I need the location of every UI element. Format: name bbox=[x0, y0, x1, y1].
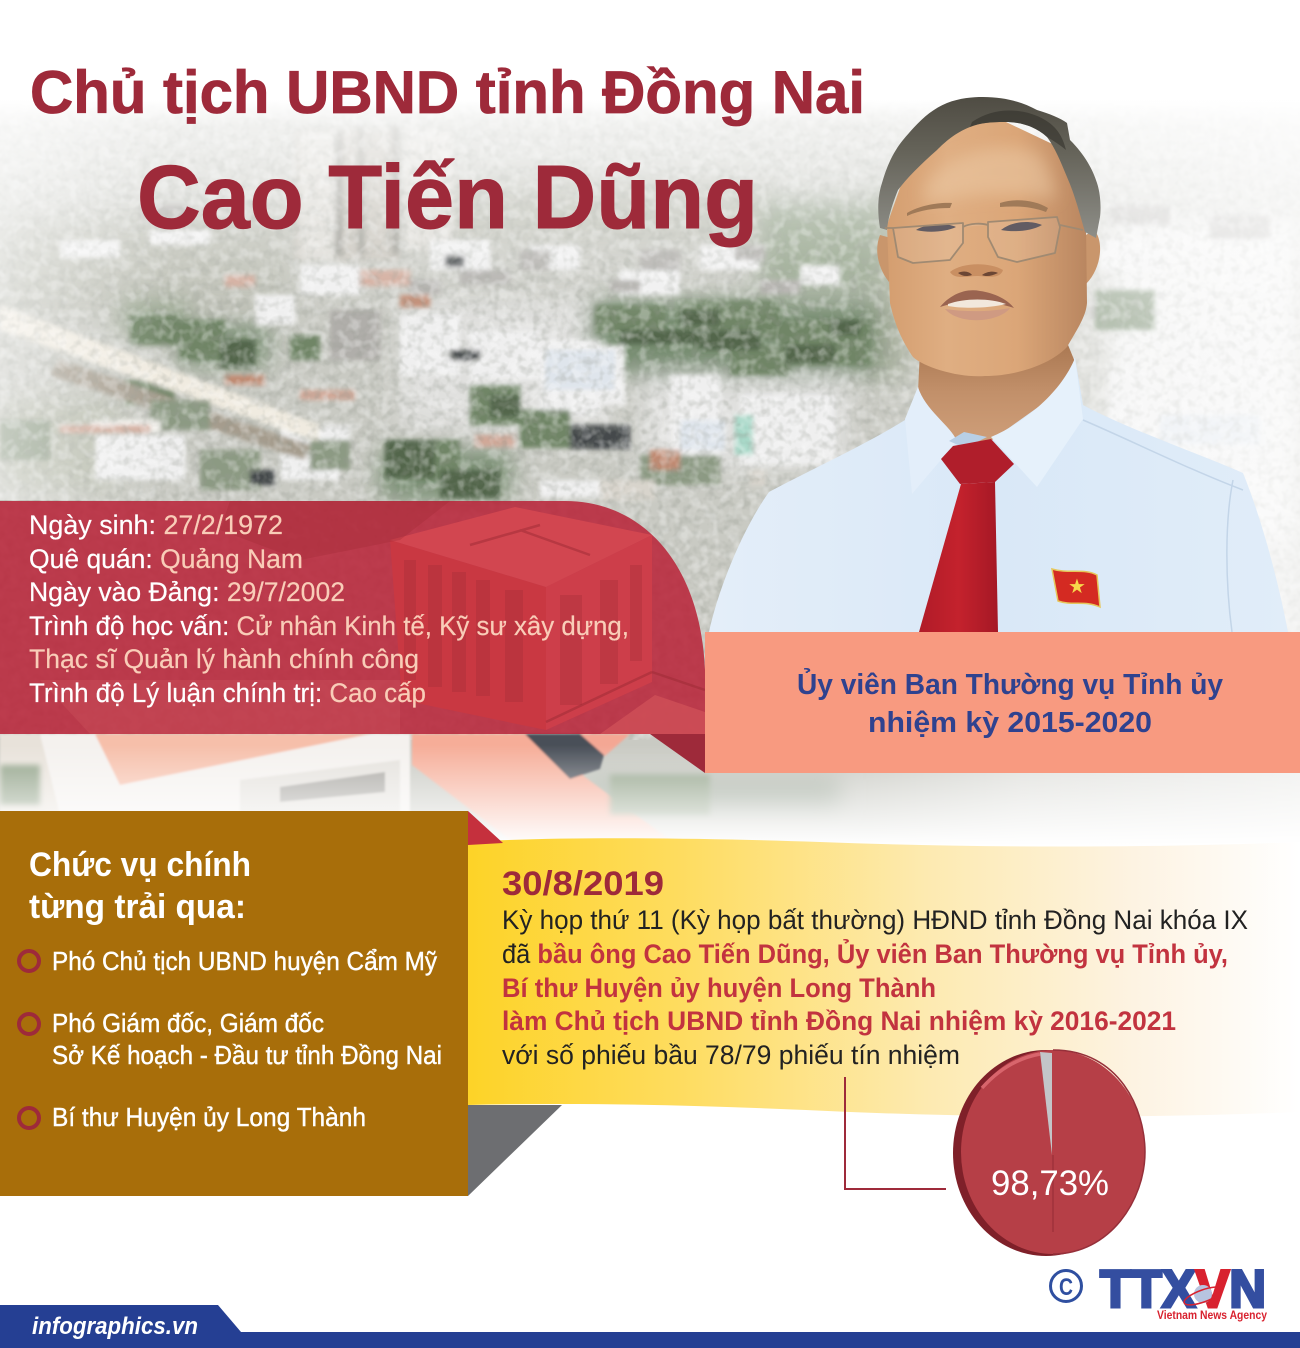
logo: globe bbox=[1182, 1284, 1224, 1308]
panel: personal information bbox=[0, 501, 705, 773]
birth date: Ngày sinh: 27/2/1972 bbox=[29, 510, 283, 540]
portrait: collar right bbox=[991, 358, 1083, 487]
portrait: eyebrows bbox=[907, 200, 1048, 216]
pie: minority slice bbox=[1040, 1052, 1052, 1155]
party join date: Ngày vào Đảng: 29/7/2002 bbox=[29, 577, 345, 607]
role line 2: nhiệm kỳ 2015-2020 bbox=[868, 707, 1152, 739]
portrait: shirt bbox=[709, 358, 1288, 632]
positions heading: Chức vụ chính bbox=[29, 846, 251, 884]
panel: fold bbox=[650, 734, 705, 773]
panel: election result band bbox=[468, 838, 1300, 1116]
portrait: badge: ★ bbox=[1068, 576, 1086, 598]
education line 2: Thạc sĩ Quản lý hành chính công bbox=[29, 644, 419, 674]
connector line to pie bbox=[845, 1077, 946, 1189]
gray corner fold bbox=[468, 1105, 562, 1196]
education: Trình độ học vấn: Cử nhân Kinh tế, Kỹ sư xây dựng, bbox=[29, 611, 629, 641]
red corner fold bbox=[468, 811, 503, 845]
portrait: nose bbox=[950, 264, 1003, 277]
pie chart: 98,73% bbox=[953, 1050, 1145, 1256]
position 2: Phó Giám đốc, Giám đốc bbox=[52, 1008, 324, 1038]
panel: building seen through bbox=[40, 501, 705, 734]
election text: làm Chủ tịch UBND tỉnh Đồng Nai nhiệm kỳ 2016-2021 bbox=[502, 1006, 1176, 1036]
copyright symbol: C bbox=[1059, 1274, 1073, 1301]
portrait bbox=[709, 97, 1288, 632]
position 2: Sở Kế hoạch - Đầu tư tỉnh Đồng Nai bbox=[52, 1040, 442, 1070]
panel: previous positions bbox=[0, 811, 468, 1196]
title line 1: Chủ tịch UBND tỉnh Đồng Nai bbox=[30, 59, 865, 126]
pale tower blocks bbox=[295, 130, 400, 260]
portrait: badge bbox=[1052, 569, 1100, 607]
portrait: collar inside bbox=[949, 432, 987, 448]
copyright symbol bbox=[1050, 1270, 1082, 1302]
portrait: mouth bbox=[940, 290, 1014, 308]
election text bbox=[502, 905, 1248, 1070]
pie: value label: 98,73% bbox=[991, 1164, 1109, 1203]
title line 2: name: Cao Tiến Dũng bbox=[137, 148, 758, 248]
election text: với số phiếu bầu 78/79 phiếu tín nhiệm bbox=[502, 1040, 960, 1070]
portrait: shirt seam bbox=[1083, 420, 1243, 632]
portrait: glasses bbox=[885, 217, 1083, 263]
election text: Kỳ họp thứ 11 (Kỳ họp bất thường) HĐND tỉnh Đồng Nai khóa IX bbox=[502, 905, 1248, 935]
lower building section bbox=[0, 734, 670, 840]
TTXVN logo: TTXVN bbox=[1100, 1260, 1266, 1319]
panel: red shape bbox=[0, 501, 705, 734]
date heading: 30/8/2019 bbox=[502, 865, 664, 903]
role line 1: Ủy viên Ban Thường vụ Tỉnh ủy bbox=[797, 667, 1223, 701]
panel: party committee role bbox=[705, 632, 1300, 773]
election text: Bí thư Huyện ủy huyện Long Thành bbox=[502, 973, 936, 1003]
portrait: hair bbox=[878, 97, 1101, 238]
portrait: ears bbox=[877, 230, 1100, 284]
logo: tagline: Vietnam News Agency bbox=[1157, 1308, 1267, 1322]
positions heading: từng trải qua: bbox=[29, 888, 246, 926]
position 3: Bí thư Huyện ủy Long Thành bbox=[52, 1102, 366, 1132]
portrait: dark hair strands bbox=[970, 110, 1066, 150]
portrait: forehead light bbox=[925, 147, 1055, 205]
position 2 bbox=[19, 1008, 442, 1070]
portrait: face bbox=[887, 112, 1087, 376]
hometown: Quê quán: Quảng Nam bbox=[29, 544, 303, 574]
political theory level: Trình độ Lý luận chính trị: Cao cấp bbox=[29, 678, 426, 708]
background: aerial city photo bbox=[0, 100, 1300, 845]
portrait: neck bbox=[918, 340, 1075, 445]
positions heading bbox=[29, 846, 251, 926]
position 1: Phó Chủ tịch UBND huyện Cẩm Mỹ bbox=[52, 946, 437, 976]
footer: website: infographics.vn bbox=[32, 1313, 198, 1340]
portrait: eyes bbox=[916, 222, 1042, 232]
portrait: collar left bbox=[905, 387, 957, 494]
election text: đã bầu ông Cao Tiến Dũng, Ủy viên Ban Thường vụ Tỉnh ủy, bbox=[502, 937, 1228, 969]
footer bar bbox=[0, 1305, 1300, 1348]
mottled photo grain bbox=[0, 100, 1300, 740]
portrait: tie bbox=[919, 439, 1014, 632]
